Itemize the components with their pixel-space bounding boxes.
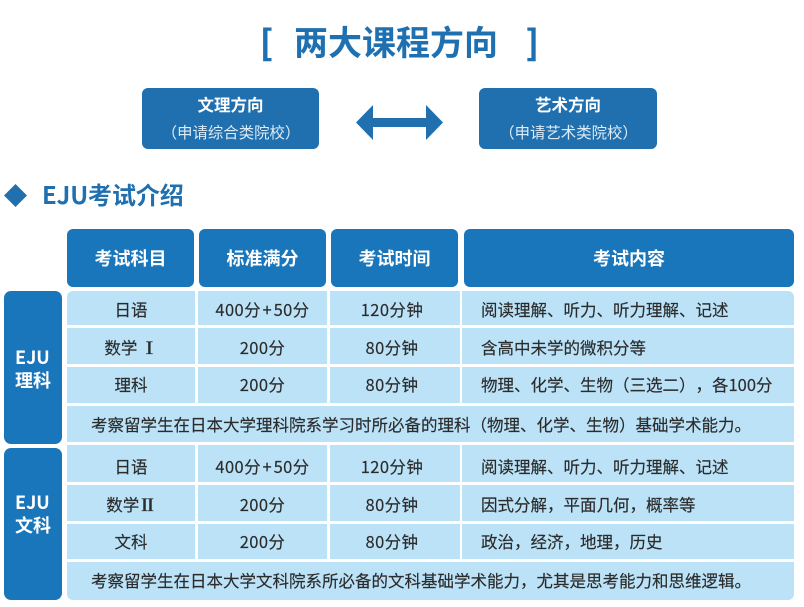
column header: full score: 标准满分 <box>226 245 298 271</box>
column header: exam content: 考试内容 <box>593 245 665 271</box>
science row 2: 80分钟 <box>366 335 418 359</box>
side label: EJU science: EJU <box>15 344 50 370</box>
humanities row 1 <box>67 445 794 482</box>
humanities row 2: 数学 <box>106 492 139 516</box>
science row 1: 120分钟 <box>361 297 423 321</box>
science row 3: 理科 <box>114 372 148 396</box>
science row 2 <box>67 328 794 364</box>
column header: exam time: 考试时间 <box>358 245 430 271</box>
science row 1 <box>67 291 794 325</box>
title: 两大课程方向 <box>294 16 498 65</box>
title: [ <box>260 16 273 65</box>
panel: science direction: 文理方向 <box>198 92 264 116</box>
science summary <box>67 406 794 442</box>
science row 3: 200分 <box>240 372 285 396</box>
column header: exam time <box>331 229 458 287</box>
humanities row 1: 日语 <box>114 454 148 478</box>
science row 2: 含高中未学的微积分等 <box>481 335 646 359</box>
humanities row 3: 80分钟 <box>366 528 418 552</box>
humanities row 3: 文科 <box>114 528 148 552</box>
side label: EJU science: 理科 <box>15 366 51 392</box>
science row 2: 200分 <box>240 335 285 359</box>
table <box>4 229 794 600</box>
science row 1: + <box>262 297 272 321</box>
humanities row 1: 阅读理解、听力、听力理解、记述 <box>481 454 728 478</box>
science summary: 考察留学生在日本大学理科院系学习时所必备的理科（物理、化学、生物）基础学术能力。 <box>91 412 751 436</box>
side label: EJU science <box>4 291 62 444</box>
science row 1: 400分 50分 <box>215 297 310 321</box>
science row 3 <box>67 367 794 403</box>
humanities row 2 <box>67 485 794 521</box>
humanities row 2: 80分钟 <box>366 492 418 516</box>
humanities row 2: 因式分解，平面几何，概率等 <box>481 492 696 516</box>
science row 1: 日语 <box>114 297 148 321</box>
humanities summary: 考察留学生在日本大学文科院系所必备的文科基础学术能力，尤其是思考能力和思维逻辑。 <box>91 568 751 592</box>
science row 3: 物理、化学、生物（三选二），各100分 <box>481 372 772 396</box>
column header: subject <box>67 229 194 287</box>
side label: EJU humanities: 文科 <box>15 512 51 538</box>
humanities row 3: 政治，经济，地理，历史 <box>481 528 662 552</box>
side label: EJU humanities: EJU <box>15 488 50 514</box>
arrow: double-headed <box>356 105 443 140</box>
column header: exam content <box>464 229 794 287</box>
panel: science direction <box>142 88 319 149</box>
heading: EJU introduction: EJU考试介绍 <box>42 176 184 211</box>
column header: full score <box>199 229 326 287</box>
humanities row 3: 200分 <box>240 528 285 552</box>
humanities summary <box>67 562 794 600</box>
panel: arts direction: （申请艺术类院校） <box>499 121 638 143</box>
title: ] <box>526 16 539 65</box>
science row 1: 阅读理解、听力、听力理解、记述 <box>481 297 728 321</box>
humanities row 1: 400分 50分 <box>215 454 310 478</box>
side label: EJU humanities <box>4 448 62 600</box>
science row 2: Ⅰ <box>141 335 158 359</box>
column header: subject: 考试科目 <box>94 245 166 271</box>
panel: arts direction: 艺术方向 <box>535 92 601 116</box>
humanities row 1: + <box>262 454 272 478</box>
science row 3: 80分钟 <box>366 372 418 396</box>
humanities row 3 <box>67 524 794 559</box>
humanities row 2: 200分 <box>240 492 285 516</box>
panel: arts direction <box>479 88 657 149</box>
humanities row 2: Ⅱ <box>139 492 156 516</box>
science row 2: 数学 <box>104 335 137 359</box>
humanities row 1: 120分钟 <box>361 454 423 478</box>
icon: diamond bullet <box>4 184 27 207</box>
panel: science direction: （申请综合类院校） <box>162 121 300 143</box>
